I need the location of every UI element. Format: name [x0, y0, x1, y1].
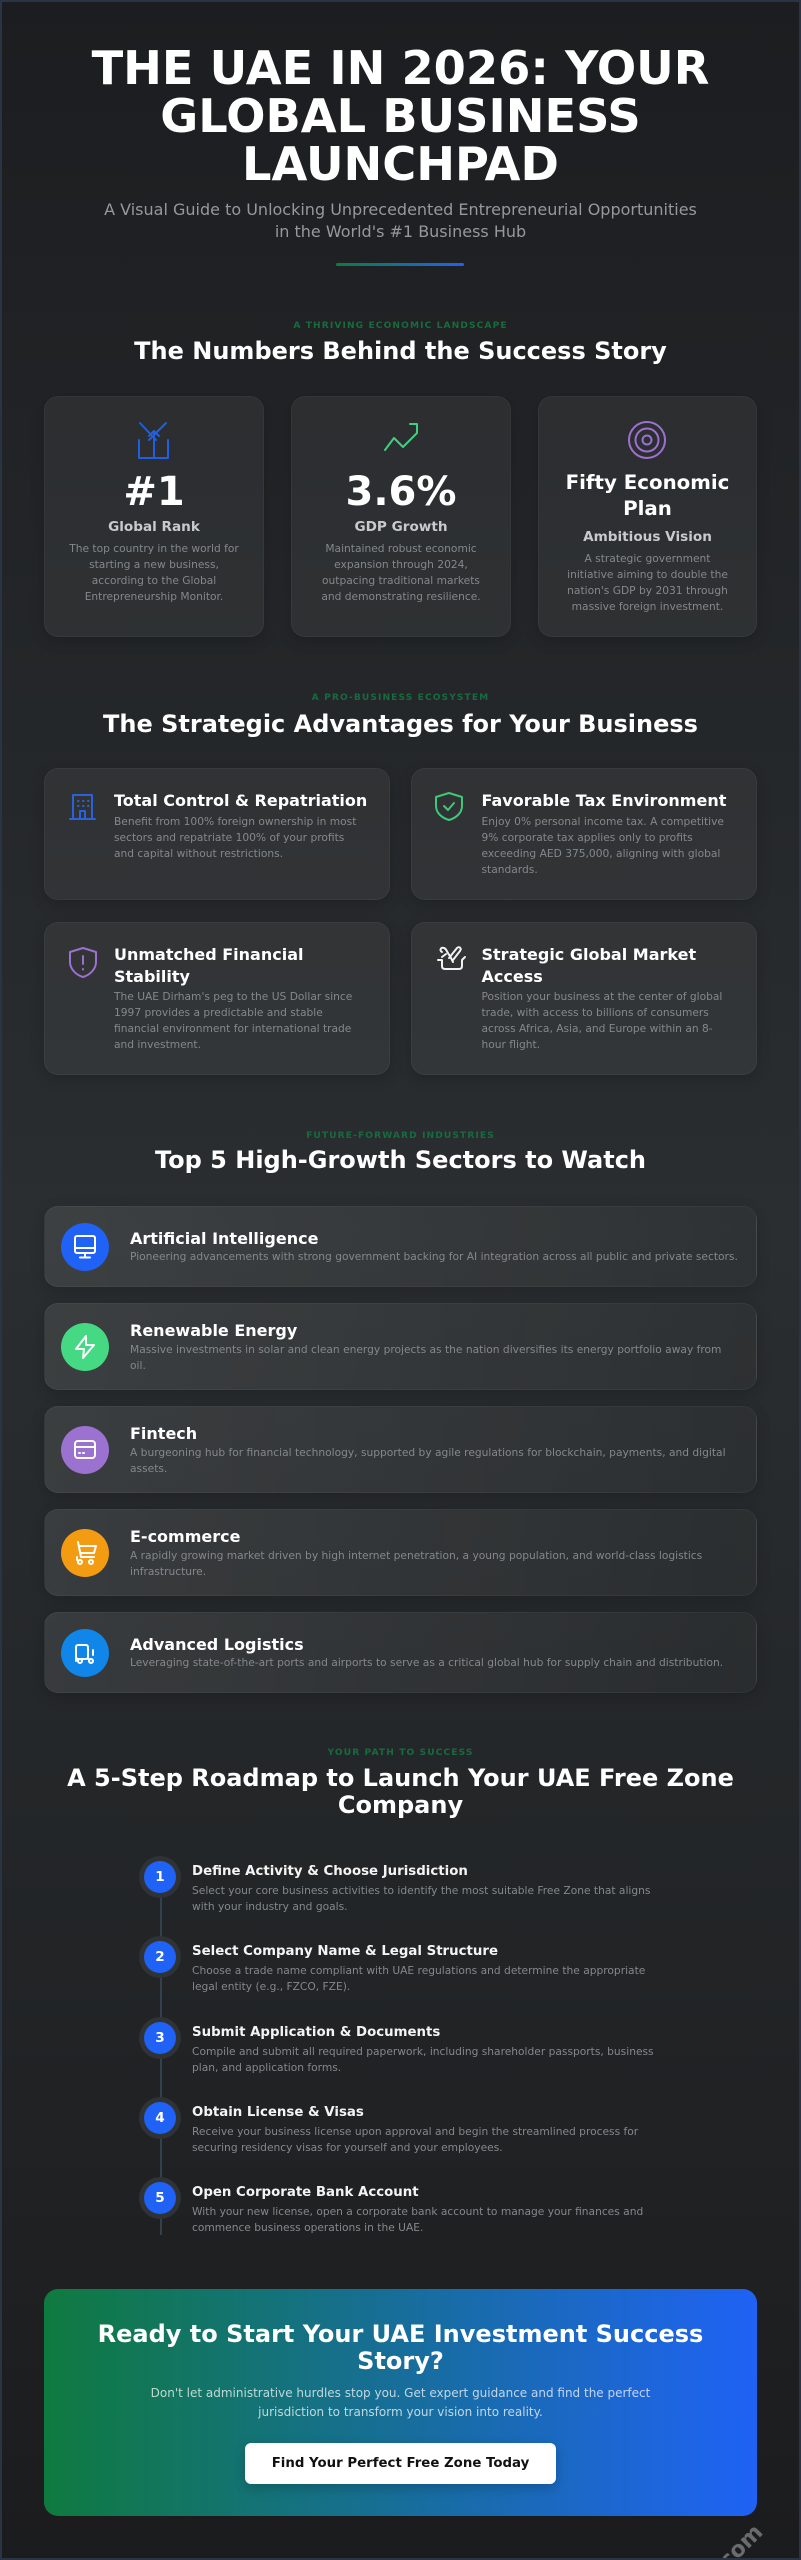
heading: Renewable Energy: [130, 1321, 297, 1340]
icon: bolt: [61, 1323, 109, 1371]
label: global rank: Global Rank: [108, 519, 200, 535]
icon: global access: [437, 946, 466, 970]
panel: fintech: [44, 1406, 757, 1493]
description: nation's GDP by 2031 through: [567, 584, 728, 597]
description: 9% corporate tax applies only to profits: [482, 831, 693, 844]
cta heading: Ready to Start Your UAE Investment Success: [98, 2320, 703, 2348]
heading: sectors: Top 5 High-Growth Sectors to Watch: [155, 1146, 646, 1174]
step description: With your new license, open a corporate bank account to manage your finances and: [192, 2205, 643, 2218]
eyebrow: pro-business: A PRO-BUSINESS ECOSYSTEM: [312, 693, 489, 703]
icon: trend: [384, 423, 418, 451]
description: Maintained robust economic: [325, 542, 477, 555]
step description: [192, 2045, 654, 2074]
panel: market access: [411, 922, 757, 1075]
panel: ambitious vision: [538, 396, 757, 637]
description: hour flight.: [482, 1038, 540, 1051]
heading: advantages: The Strategic Advantages for Your Business: [103, 710, 698, 738]
heading: roadmap: Company: [338, 1791, 463, 1819]
heading: Strategic Global Market: [482, 945, 696, 964]
step title: Submit Application & Documents: [192, 2025, 440, 2040]
heading: Advanced Logistics: [130, 1635, 304, 1654]
step number: [144, 2182, 176, 2214]
icon: rank: [138, 422, 169, 459]
description: initiative aiming to double the: [567, 568, 728, 581]
icon: card: [61, 1426, 109, 1474]
description: and capital without restrictions.: [114, 847, 283, 860]
title: [92, 41, 709, 191]
step number: 5: [155, 2190, 165, 2206]
step description: [192, 1884, 650, 1913]
description: and demonstrating resilience.: [321, 590, 481, 603]
step 4: [139, 2097, 638, 2154]
eyebrow: economic landscape: A THRIVING ECONOMIC LANDSCAPE: [293, 321, 508, 331]
value: #1: #1: [123, 469, 185, 515]
panel: tax: [411, 768, 757, 900]
step description: Receive your business license upon approval and begin the streamlined process for: [192, 2125, 638, 2138]
heading: Fintech: [130, 1424, 197, 1443]
step description: [192, 1964, 645, 1993]
cta button: Find Your Perfect Free Zone Today: [272, 2456, 529, 2471]
panel: call to action: [44, 2289, 757, 2516]
step description: [192, 2125, 638, 2154]
description: A strategic government: [584, 552, 710, 565]
description: oil.: [130, 1359, 146, 1372]
value: 3.6%: 3.6%: [346, 469, 456, 515]
description: across Africa, Asia, and Europe within an 8-: [482, 1022, 713, 1035]
step description: Select your core business activities to identify the most suitable Free Zone that aligns: [192, 1884, 650, 1897]
step 2: [139, 1936, 645, 1993]
step number: [144, 2022, 176, 2054]
panel: renewable energy: [44, 1303, 757, 1390]
description: Entrepreneurship Monitor.: [85, 590, 223, 603]
step description: Choose a trade name compliant with UAE regulations and determine the appropriate: [192, 1964, 645, 1977]
panel: stability: [44, 922, 390, 1075]
description: trade, with access to billions of consumers: [482, 1006, 709, 1019]
description: massive foreign investment.: [572, 600, 723, 613]
eyebrow: industries: FUTURE-FORWARD INDUSTRIES: [306, 1131, 495, 1141]
description: The UAE Dirham's peg to the US Dollar since: [114, 990, 352, 1003]
cta text: Don't let administrative hurdles stop you. Get expert guidance and find the perfect: [151, 2386, 650, 2400]
heading: Total Control & Repatriation: [114, 791, 367, 810]
value: fifty economic plan: [566, 471, 729, 520]
icon: cart: [61, 1529, 109, 1577]
description: expansion through 2024,: [334, 558, 468, 571]
step number: 4: [155, 2110, 165, 2126]
step 3: [139, 2017, 654, 2074]
step description: legal entity (e.g., FZCO, FZE).: [192, 1980, 350, 1993]
subtitle: A Visual Guide to Unlocking Unprecedented Entrepreneurial Opportunities: [104, 200, 697, 219]
heading: Favorable Tax Environment: [482, 791, 726, 810]
step number: 2: [155, 1949, 165, 1965]
heading: roadmap: [67, 1764, 734, 1819]
step description: securing residency visas for yourself and your employees.: [192, 2141, 503, 2154]
step number: [144, 2102, 176, 2134]
heading: E-commerce: [130, 1527, 240, 1546]
description: [482, 990, 722, 1051]
heading: roadmap: A 5-Step Roadmap to Launch Your UAE Free Zone: [67, 1764, 734, 1792]
description: Pioneering advancements with strong government backing for AI integration across all public and private sectors.: [130, 1250, 738, 1263]
panel: advanced logistics: [44, 1612, 757, 1693]
description: Leveraging state-of-the-art ports and airports to serve as a critical global hub for supply chain and distribution.: [130, 1656, 723, 1669]
cta text: [151, 2386, 650, 2419]
description: [130, 1343, 721, 1372]
step number: 1: [155, 1869, 165, 1885]
step title: Select Company Name & Legal Structure: [192, 1944, 498, 1959]
heading: numbers: The Numbers Behind the Success Story: [134, 337, 667, 365]
heading: Unmatched Financial: [114, 945, 304, 964]
step number: 3: [155, 2030, 165, 2046]
description: infrastructure.: [130, 1565, 206, 1578]
panel: global rank: [44, 396, 264, 637]
step 1: [139, 1856, 650, 1913]
description: and investment.: [114, 1038, 201, 1051]
description: assets.: [130, 1462, 167, 1475]
description: A rapidly growing market driven by high internet penetration, a young population, and world-class logistics: [130, 1549, 702, 1562]
description: A burgeoning hub for financial technology, supported by agile regulations for blockchain, payments, and digital: [130, 1446, 726, 1459]
step title: Open Corporate Bank Account: [192, 2185, 419, 2200]
step 5: [139, 2177, 643, 2234]
heading: [114, 945, 304, 986]
cta heading: Story?: [357, 2347, 444, 2375]
step description: plan, and application forms.: [192, 2061, 341, 2074]
subtitle: [104, 200, 697, 240]
label: gdp growth: GDP Growth: [354, 519, 448, 535]
description: according to the Global: [92, 574, 216, 587]
panel: e-commerce: [44, 1509, 757, 1596]
icon: shield alert: [69, 947, 97, 978]
step description: commence business operations in the UAE.: [192, 2221, 423, 2234]
subtitle: in the World's #1 Business Hub: [275, 222, 526, 240]
heading: [482, 945, 696, 986]
step description: [192, 2205, 643, 2234]
value: fifty economic plan: Plan: [623, 497, 672, 520]
description: [114, 815, 356, 860]
description: Benefit from 100% foreign ownership in most: [114, 815, 356, 828]
title: LAUNCHPAD: [242, 137, 559, 191]
description: [114, 990, 352, 1051]
description: Massive investments in solar and clean energy projects as the nation diversifies its energy portfolio away from: [130, 1343, 721, 1356]
step description: with your industry and goals.: [192, 1900, 348, 1913]
description: sectors and repatriate 100% of your profits: [114, 831, 344, 844]
description: [321, 542, 481, 603]
icon: monitor: [61, 1223, 109, 1271]
description: outpacing traditional markets: [322, 574, 480, 587]
label: ambitious vision: Ambitious Vision: [583, 529, 712, 545]
timeline line: [160, 1877, 162, 2235]
description: standards.: [482, 863, 538, 876]
cta heading: [98, 2320, 703, 2375]
header divider: [336, 263, 464, 266]
panel: total control: [44, 768, 390, 900]
description: Enjoy 0% personal income tax. A competitive: [482, 815, 724, 828]
description: financial environment for international trade: [114, 1022, 351, 1035]
icon: target: [628, 421, 666, 459]
step title: Define Activity & Choose Jurisdiction: [192, 1864, 468, 1879]
step number: [144, 1861, 176, 1893]
description: The top country in the world for: [69, 542, 239, 555]
heading: Access: [482, 966, 543, 986]
description: [130, 1549, 702, 1578]
description: [482, 815, 724, 876]
title: THE UAE IN 2026: YOUR: [92, 41, 709, 95]
step number: [144, 1941, 176, 1973]
step title: Obtain License & Visas: [192, 2105, 364, 2120]
step description: Compile and submit all required paperwork, including shareholder passports, business: [192, 2045, 654, 2058]
description: [567, 552, 728, 613]
cta button: [245, 2443, 556, 2484]
cta text: jurisdiction to transform your vision into reality.: [258, 2405, 543, 2419]
description: exceeding AED 375,000, aligning with global: [482, 847, 720, 860]
title: GLOBAL BUSINESS: [160, 89, 641, 143]
value: fifty economic plan: Fifty Economic: [566, 471, 729, 494]
eyebrow: path to success: YOUR PATH TO SUCCESS: [328, 1748, 473, 1758]
panel: gdp growth: [291, 396, 511, 637]
description: Position your business at the center of global: [482, 990, 722, 1003]
description: [69, 542, 239, 603]
heading: Artificial Intelligence: [130, 1229, 318, 1248]
icon: truck: [61, 1629, 109, 1677]
heading: Stability: [114, 966, 190, 986]
icon: building: [69, 794, 96, 820]
panel: artificial intelligence: [44, 1206, 757, 1287]
icon: shield check: [435, 792, 463, 821]
description: [130, 1446, 726, 1475]
description: starting a new business,: [89, 558, 219, 571]
description: 1997 provides a predictable and stable: [114, 1006, 323, 1019]
